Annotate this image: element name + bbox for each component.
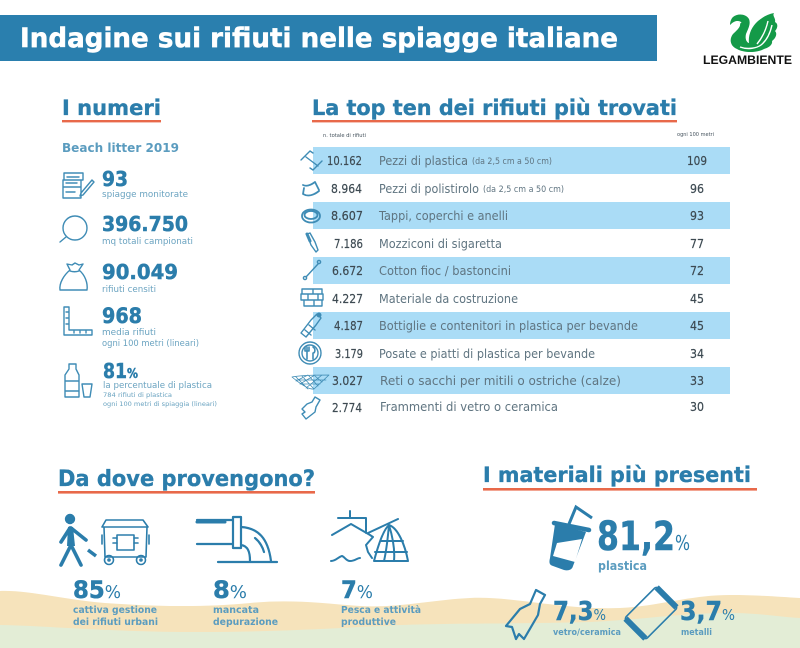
source: fishing: produttive [341,617,396,628]
row 4: Mozziconi di sigaretta [379,237,502,251]
icon: broken bottle [506,590,545,639]
title banner: Indagine sui rifiuti nelle spiagge italiane [20,23,618,54]
row 10: 2.774 [332,400,362,415]
stat: 90.049: 90.049 [102,260,178,284]
stat: 93: 93 [102,167,128,191]
icon: cup with straw [549,507,592,570]
stat: 968: media rifiuti [102,328,156,338]
row 4 [307,233,704,252]
row 6 [301,289,704,306]
icon: person and bin [61,514,149,565]
stat: 93: spiagge monitorate [102,190,188,200]
table: top ten [292,132,730,419]
material: plastic: 81,2% [597,514,690,560]
icon: bottle and cup [65,364,92,397]
row 3: 8.607 [331,208,363,223]
row 3 [302,208,704,223]
icon: mussel net [292,375,329,389]
row 5: Cotton fioc / bastoncini [379,264,511,278]
material: metals: 3,7% [680,597,735,627]
material: glass: 7,3% [553,597,606,627]
row 1: 109 [687,153,707,168]
heading: I numeri: I numeri [62,96,161,120]
icon: magnifier [60,216,87,242]
row 1: (da 2,5 cm a 50 cm) [472,157,552,167]
column header: per 100 metres: ogni 100 metri [677,132,714,138]
icon: can [623,585,679,641]
icon: cotton swab [303,260,321,280]
icon: cap ring [302,210,320,222]
source: sewage: 8% [213,576,247,604]
row 5: 6.672 [332,263,363,278]
source: fishing: Pesca e attività [341,605,421,616]
row 5 [303,260,704,280]
row 3: 93 [690,208,704,223]
source: sewage [197,517,278,628]
row 4: 77 [690,236,704,251]
source: fishing [331,511,421,628]
row 6: 45 [690,291,704,306]
stat: 81% [65,359,217,408]
logo: Legambiente [703,13,792,67]
row 2 [303,181,704,196]
stat: 396.750: mq totali campionati [102,237,193,247]
row 9: 3.027 [332,373,363,388]
material: plastic [549,507,690,573]
material: plastic: plastica [598,559,647,573]
material: metals [623,585,735,641]
icon: plate and cutlery [299,342,321,364]
row 10 [302,397,704,419]
source: urban waste: 85% [73,576,121,604]
icon: rubbish bag [60,263,87,290]
row 9 [292,373,704,389]
stat: 81%: la percentuale di plastica [103,381,212,391]
icon: documents and pen [63,173,94,198]
row 2: Pezzi di polistirolo [379,182,479,196]
row 7: 4.187 [334,318,363,333]
row 1: 10.162 [327,153,362,168]
icon: bricks [301,289,323,306]
row 10: 30 [690,399,704,414]
logo: Legambiente: LEGAMBIENTE [703,55,792,67]
source: urban waste [61,514,158,628]
row stripes [313,147,730,394]
icon: set square ruler [64,307,92,335]
heading: top ten: La top ten dei rifiuti più trovati [312,96,677,120]
row 2: 8.964 [331,181,362,196]
source: sewage: depurazione [213,617,278,628]
subheading: Beach litter 2019: Beach litter 2019 [62,140,179,155]
source: sewage: mancata [213,605,259,616]
stat: 81%: ogni 100 metri di spiaggia (lineari) [103,400,217,408]
heading: I materiali: I materiali più presenti [483,463,751,488]
stat: 90.049 [60,260,178,295]
row 8 [299,342,704,364]
stat: 396.750 [60,212,193,247]
row 9: 33 [690,373,704,388]
row 8: Posate e piatti di plastica per bevande [379,347,595,361]
source: urban waste: cattiva gestione [73,605,157,616]
stat: 93 [63,167,188,200]
row 7: 45 [690,318,704,333]
row 9: Reti o sacchi per mitili o ostriche (calze) [380,374,621,388]
icon: plastic pieces [301,151,322,170]
title banner [0,15,657,61]
row 8: 3.179 [335,346,363,361]
row 2: (da 2,5 cm a 50 cm) [483,185,564,195]
column header: total: n. totale di rifiuti [323,133,366,139]
stat: 81%: 784 rifiuti di plastica [103,391,172,399]
heading: Da dove provengono: Da dove provengono? [58,467,315,492]
row 7: Bottiglie e contenitori in plastica per bevande [379,319,638,333]
row 5: 72 [690,263,704,278]
row 4: 7.186 [334,236,363,251]
background sand and grass waves [0,591,800,648]
icon: boat and net [331,511,408,561]
row 10: Frammenti di vetro o ceramica [380,400,558,414]
row 7 [301,313,704,337]
icon: broken glass bottle [302,397,320,419]
row 3: Tappi, coperchi e anelli [378,209,508,223]
stat: 81%: 81% [103,359,138,383]
stat: 968 [64,304,199,349]
stat: 968: 968 [102,304,142,328]
stat: 968: ogni 100 metri (lineari) [102,339,199,349]
source: fishing: 7% [341,576,373,604]
material: glass [506,590,621,639]
row 8: 34 [690,346,704,361]
row 6: 4.227 [332,291,363,306]
row 1 [301,151,707,170]
stat: 90.049: rifiuti censiti [102,285,156,295]
material: metals: metalli [681,628,712,638]
icon: plastic bottle [301,313,321,337]
row 2: 96 [690,181,704,196]
row 6: Materiale da costruzione [379,292,518,306]
icon: cigarette butt [307,233,318,252]
icon: polystyrene piece [303,182,319,195]
row 1: Pezzi di plastica [379,154,468,168]
material: glass: vetro/ceramica [553,628,621,638]
source: urban waste: dei rifiuti urbani [73,617,158,628]
icon: drain pipe [197,517,277,562]
stat: 396.750: 396.750 [102,212,188,236]
